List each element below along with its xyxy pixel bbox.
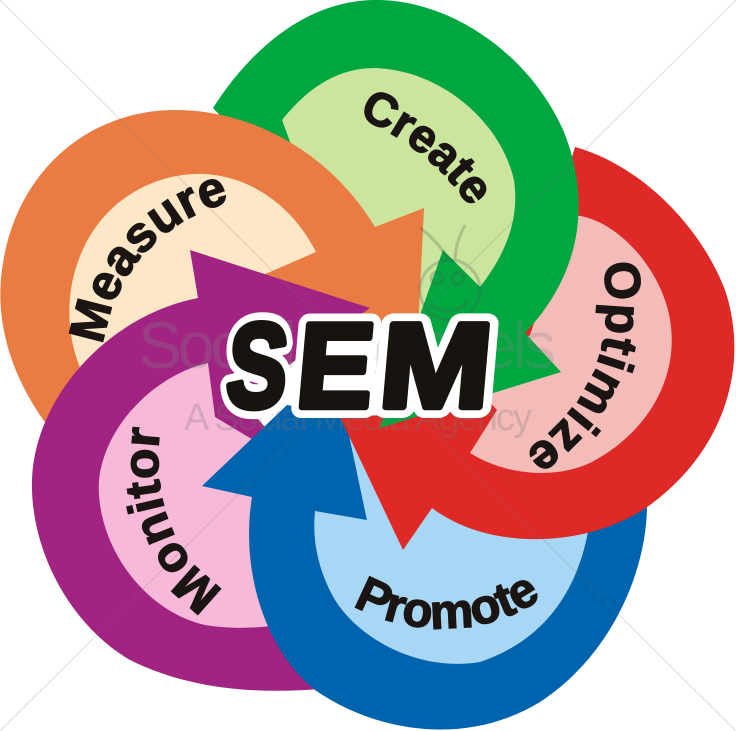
label: Promote: Promote [354, 576, 538, 630]
panel: Measure ring (orange) [0, 110, 424, 425]
label: Create: Create [364, 92, 486, 204]
heading: SEM: E [292, 299, 380, 433]
heading: SEM: M [375, 299, 498, 433]
panel: Monitor ring (purple) [32, 250, 370, 691]
watermark: Social Channels [138, 308, 556, 382]
heading: SEM [222, 299, 498, 433]
panel: Promote ring (blue) [202, 405, 647, 730]
panel: Optimize ring (red) [340, 147, 734, 550]
label: Monitor: Monitor [126, 426, 222, 616]
panel: Create arrowhead (green, on top) [380, 120, 579, 428]
label: Optimize: Optimize [530, 262, 641, 469]
heading: SEM: M [375, 299, 498, 433]
label: Measure: Measure [68, 179, 226, 342]
watermark: A Social Media Agency [184, 397, 532, 439]
heading: SEM: S [222, 299, 294, 433]
heading: SEM: E [292, 299, 380, 433]
heading: SEM: S [222, 299, 294, 433]
panel: Create ring (green) [213, 0, 579, 428]
